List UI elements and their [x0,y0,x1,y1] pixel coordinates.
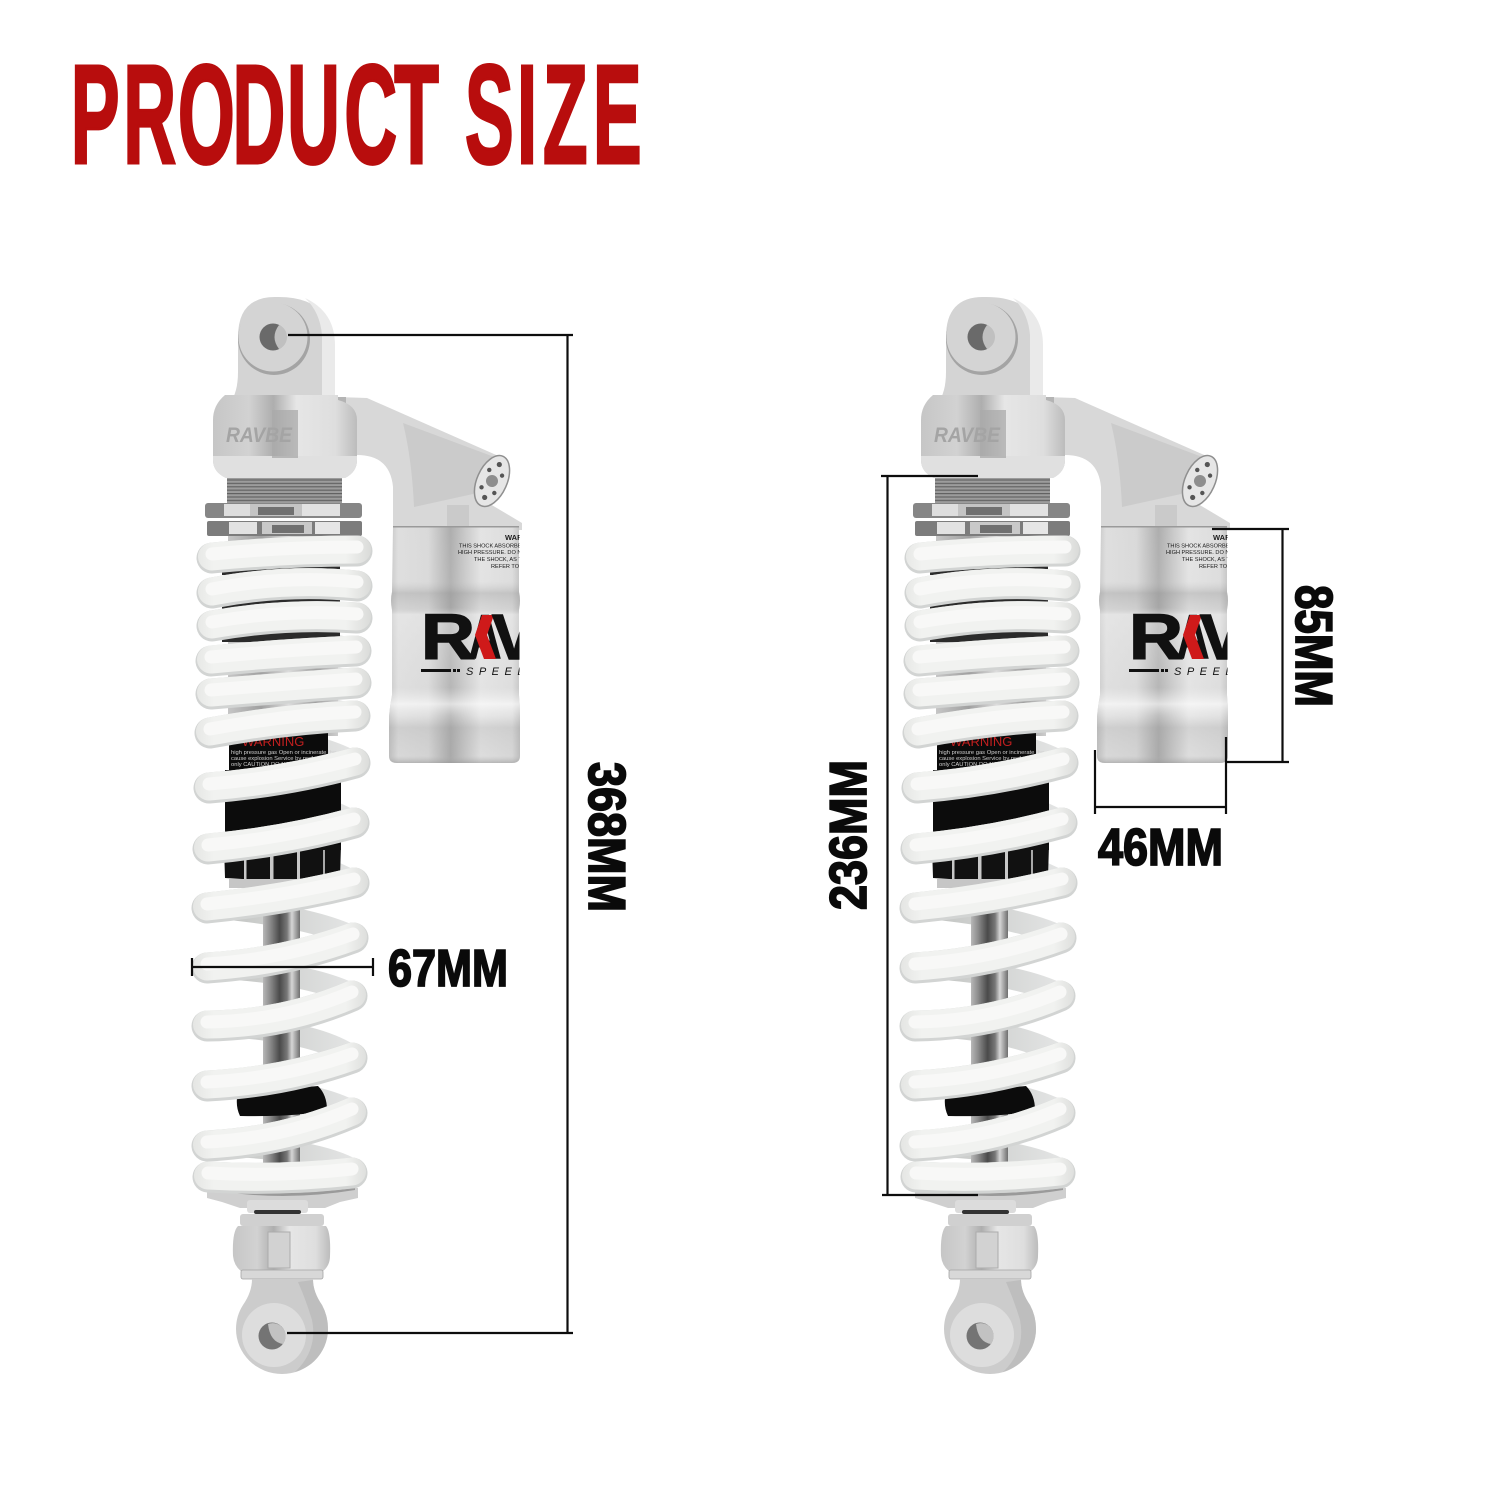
top mounting eye [233,297,335,398]
canister warning text: WARNING [505,533,541,542]
collar engraved logo: RAVBE [934,424,1001,447]
canister warning text [1166,535,1228,568]
reservoir canister [389,526,520,763]
warning sticker [937,733,1044,773]
dimension: overall length 368MM: 368MM [577,762,635,912]
warning sticker: WARNING [242,734,304,749]
threaded preload nuts [913,477,1070,536]
canister warning text: THIS SHOCK ABSORBER CONTAINS [1167,544,1264,550]
lower mounting eye and adjuster [915,1188,1066,1374]
dimension: reservoir height 85MM [1212,529,1342,762]
warning sticker [229,733,336,773]
dimension: reservoir width 46MM: 46MM [1098,819,1223,877]
canister brand logo [1129,614,1228,675]
threaded preload nuts [205,477,362,536]
warning sticker: high pressure gas Open or incinerate the [939,750,1044,756]
canister brand logo: SPEED [466,666,531,678]
lower mounting eye and adjuster [207,1188,358,1374]
dimension: reservoir width 46MM [1095,737,1226,877]
damper body [932,770,1049,888]
canister brand logo [421,614,520,675]
collar engraved logo: RAVBE [226,424,293,447]
reservoir arm and collar [213,395,522,530]
dimension: spring length 236MM [820,476,978,1195]
inner tube [930,536,1048,736]
dimension: reservoir height 85MM: 85MM [1284,585,1342,707]
reservoir arm and collar [921,395,1230,530]
inner tube [222,536,340,736]
piston shaft [263,885,300,1185]
spring front coils [207,547,357,1178]
canister warning text: HIGH PRESSURE. DO NOT ATTEMPT [458,550,557,556]
canister brand logo: A [468,601,502,673]
left shock absorber [205,297,557,1374]
damper body [224,770,341,888]
spring rear coils [918,540,1061,1170]
canister brand logo: A [1176,601,1210,673]
canister warning text: HIGH PRESSURE. DO NOT ATTEMPT [1166,550,1265,556]
warning sticker: cause explosion Service by professional [231,756,334,762]
canister warning text: THE SHOCK, AS THE GAS [1182,557,1251,563]
spring rear coils [210,540,353,1170]
canister brand logo: R [421,601,475,673]
piston shaft [971,885,1008,1185]
dimension: overall length 368MM [287,335,635,1333]
dimension: spring diameter 67MM [192,940,508,998]
canister brand logo: R [1129,601,1183,673]
warning sticker: only CAUTION DO NOT [939,762,1002,768]
canister warning text: THIS SHOCK ABSORBER CONTAINS [459,544,556,550]
title: PRODUCT SIZE [71,35,642,193]
right shock absorber [913,297,1265,1374]
dimension: spring diameter 67MM: 67MM [388,940,508,998]
canister warning text [458,535,520,568]
dimension: spring length 236MM: 236MM [820,760,878,910]
canister brand logo: V [492,601,536,673]
spring front coils [915,547,1065,1178]
canister brand logo: SPEED [1174,666,1239,678]
rubber bump stop [945,1086,1035,1116]
canister warning text: REFER TO THE MANUAL [1199,564,1265,570]
canister brand logo: V [1200,601,1244,673]
warning sticker: high pressure gas Open or incinerate the [231,750,336,756]
canister warning text: WARNING [1213,533,1249,542]
top mounting eye [941,297,1043,398]
canister warning text: REFER TO THE MANUAL [491,564,557,570]
rubber bump stop [237,1086,327,1116]
canister warning text: THE SHOCK, AS THE GAS [474,557,543,563]
warning sticker: only CAUTION DO NOT [231,762,294,768]
warning sticker: WARNING [950,734,1012,749]
warning sticker: cause explosion Service by professional [939,756,1042,762]
reservoir canister [1097,526,1228,763]
